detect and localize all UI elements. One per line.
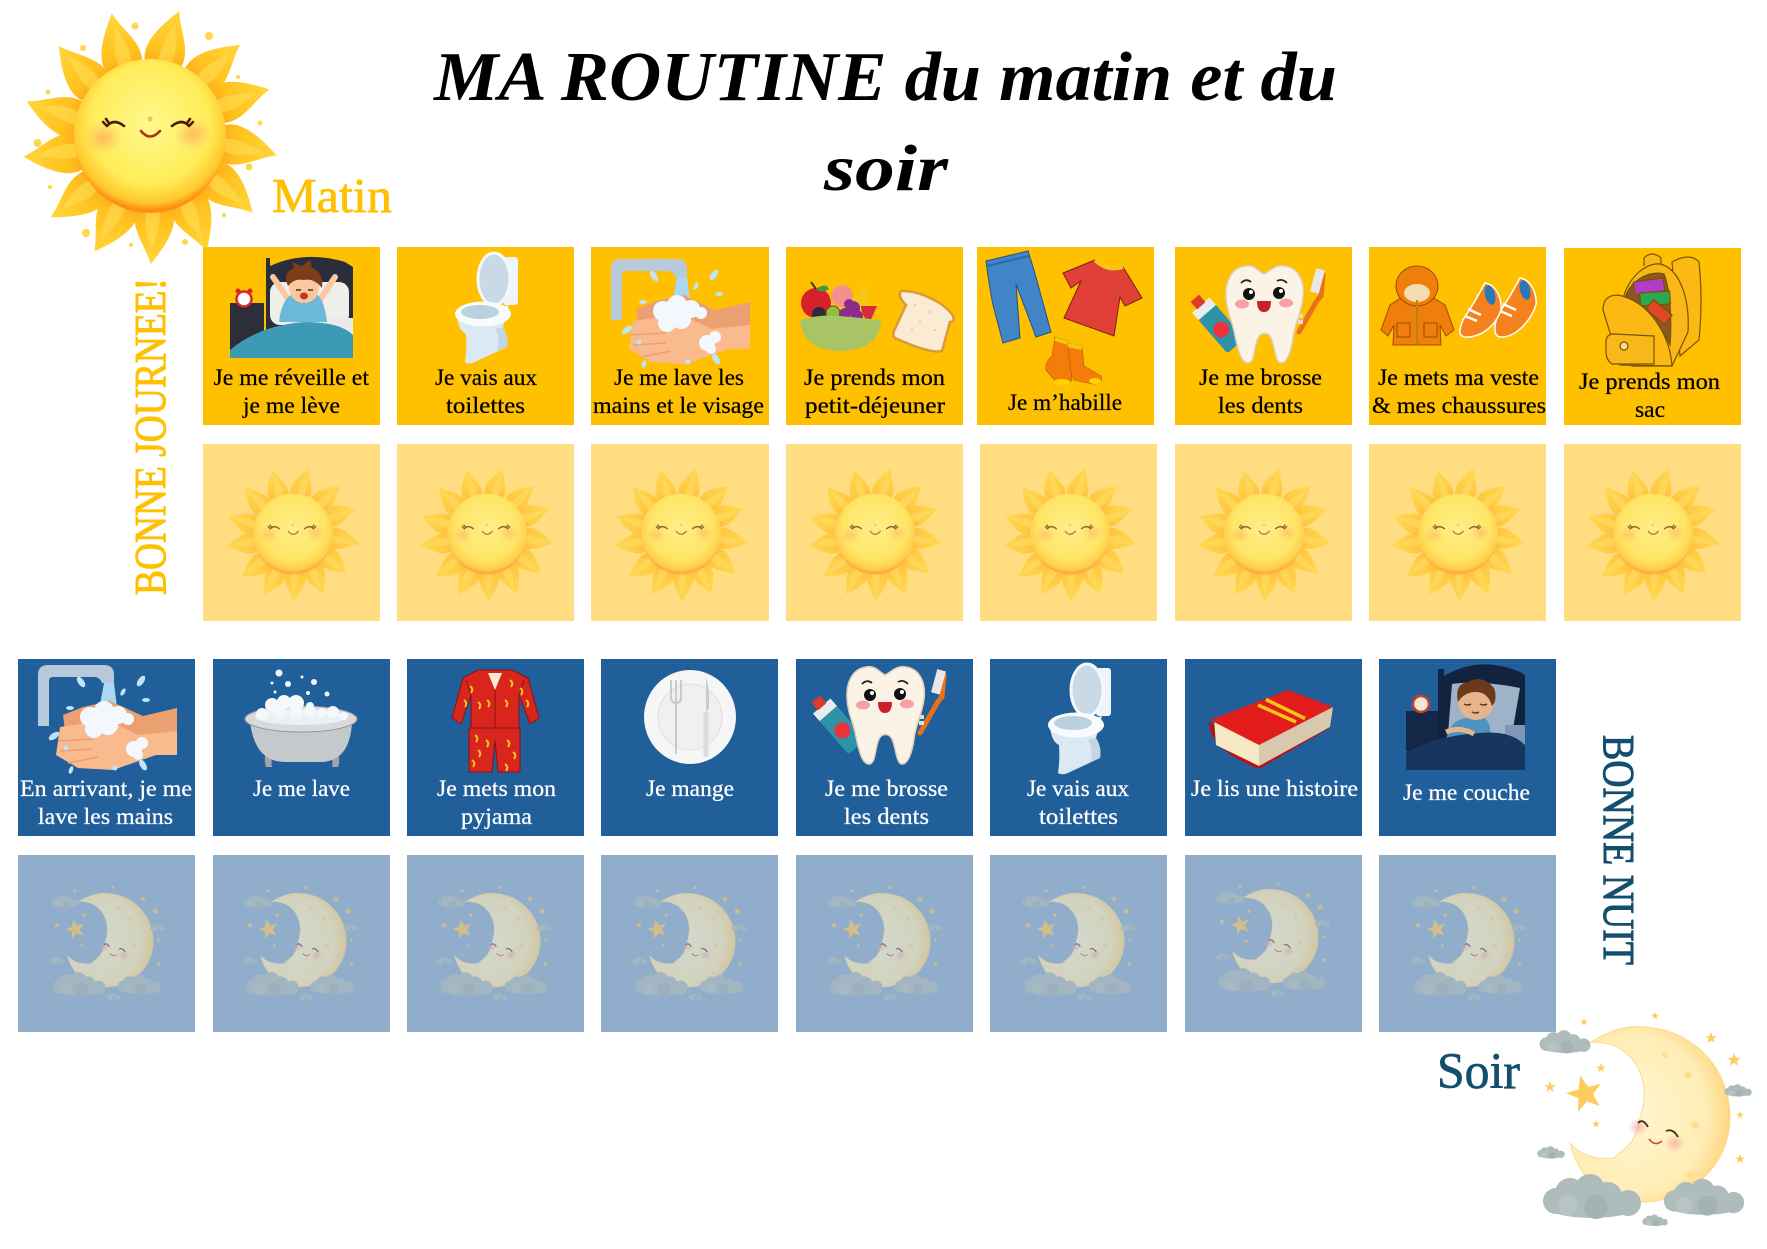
panel: morning sun reward tiles bbox=[203, 444, 1741, 621]
label: petit-déjeuner bbox=[805, 393, 945, 418]
label: Je m’habille bbox=[1008, 390, 1122, 415]
label: mains et le visage bbox=[593, 393, 764, 418]
icon: washing hands bbox=[611, 259, 750, 368]
card: brossage des dents soir bbox=[796, 659, 973, 836]
card: je m'habille bbox=[977, 247, 1154, 425]
icon: clothes bbox=[986, 251, 1142, 385]
card: je me lave bbox=[213, 659, 390, 836]
vertical text: Bonne journée: BONNE JOURNEE! bbox=[126, 278, 175, 595]
card: toilettes soir bbox=[990, 659, 1167, 836]
icon: large crescent moon bbox=[1537, 1012, 1752, 1226]
label bbox=[1199, 365, 1322, 418]
label: Je me lave bbox=[253, 776, 350, 801]
label: Je prends mon bbox=[1579, 369, 1721, 394]
label bbox=[214, 365, 370, 418]
icon: large smiling sun bbox=[21, 6, 279, 265]
label: Je vais aux bbox=[435, 365, 538, 390]
card: je me réveille bbox=[203, 247, 380, 425]
label: Je me lave les bbox=[614, 365, 744, 390]
icon: tooth mascot bbox=[807, 667, 946, 764]
label: Je me couche bbox=[1403, 780, 1530, 805]
heading: Soir: Soir bbox=[1437, 1044, 1520, 1100]
card: brossage des dents bbox=[1175, 247, 1352, 425]
card: je prends mon sac bbox=[1564, 248, 1741, 425]
label bbox=[1372, 365, 1546, 418]
label: sac bbox=[1635, 397, 1665, 422]
label bbox=[435, 365, 538, 418]
card: pyjama bbox=[407, 659, 584, 836]
label: les dents bbox=[844, 804, 929, 829]
panel: morning routine cards bbox=[203, 247, 1741, 425]
heading: Matin: Matin bbox=[272, 168, 392, 223]
label: Je mets ma veste bbox=[1378, 365, 1539, 390]
icon: backpack bbox=[1603, 254, 1701, 366]
icon: sleeping child bbox=[1406, 664, 1525, 770]
icon: tooth mascot bbox=[1186, 266, 1325, 363]
icon: fruit bowl and toast bbox=[800, 282, 954, 351]
card: histoire bbox=[1185, 659, 1362, 836]
title: soir bbox=[823, 132, 950, 205]
label: Je me réveille et bbox=[214, 365, 370, 390]
icon: jacket and shoes bbox=[1381, 266, 1536, 345]
card: je me couche bbox=[1379, 659, 1556, 836]
icon: red pyjamas bbox=[452, 670, 539, 772]
label bbox=[20, 776, 192, 829]
icon: washing hands bbox=[38, 665, 177, 774]
vertical text: Bonne nuit: BONNE NUIT bbox=[1594, 735, 1643, 965]
panel: evening moon reward tiles bbox=[18, 855, 1556, 1032]
icon: bathtub bbox=[245, 670, 357, 767]
label: je me lève bbox=[242, 393, 340, 418]
label: & mes chaussures bbox=[1372, 393, 1546, 418]
card: veste et chaussures bbox=[1369, 247, 1546, 425]
label: Je vais aux bbox=[1027, 776, 1130, 801]
card: je mange bbox=[601, 659, 778, 836]
title: MA ROUTINE du matin et du bbox=[433, 39, 1337, 116]
label bbox=[1579, 369, 1721, 422]
title bbox=[433, 39, 1337, 205]
icon: plate with cutlery bbox=[644, 670, 736, 764]
label bbox=[825, 776, 948, 829]
panel: evening routine cards bbox=[18, 659, 1556, 836]
card: en arrivant bbox=[18, 659, 195, 836]
card: lavage des mains bbox=[591, 247, 769, 425]
label: Je me brosse bbox=[825, 776, 948, 801]
card: petit-déjeuner bbox=[786, 247, 963, 425]
label: Je prends mon bbox=[804, 365, 946, 390]
label: pyjama bbox=[461, 804, 532, 829]
label: les dents bbox=[1218, 393, 1303, 418]
label bbox=[593, 365, 764, 418]
label bbox=[804, 365, 946, 418]
icon: red book bbox=[1209, 690, 1333, 769]
icon: toilet bbox=[1048, 664, 1111, 774]
label: Je mange bbox=[646, 776, 734, 801]
label: toilettes bbox=[446, 393, 525, 418]
card: toilettes bbox=[397, 247, 574, 425]
icon: toilet bbox=[455, 253, 518, 363]
label: lave les mains bbox=[38, 804, 173, 829]
label bbox=[437, 776, 557, 829]
label bbox=[1027, 776, 1130, 829]
label: En arrivant, je me bbox=[20, 776, 192, 801]
label: toilettes bbox=[1039, 804, 1118, 829]
icon: child waking up bbox=[230, 257, 353, 358]
label: Je mets mon bbox=[437, 776, 557, 801]
label: Je lis une histoire bbox=[1191, 776, 1358, 801]
label: Je me brosse bbox=[1199, 365, 1322, 390]
